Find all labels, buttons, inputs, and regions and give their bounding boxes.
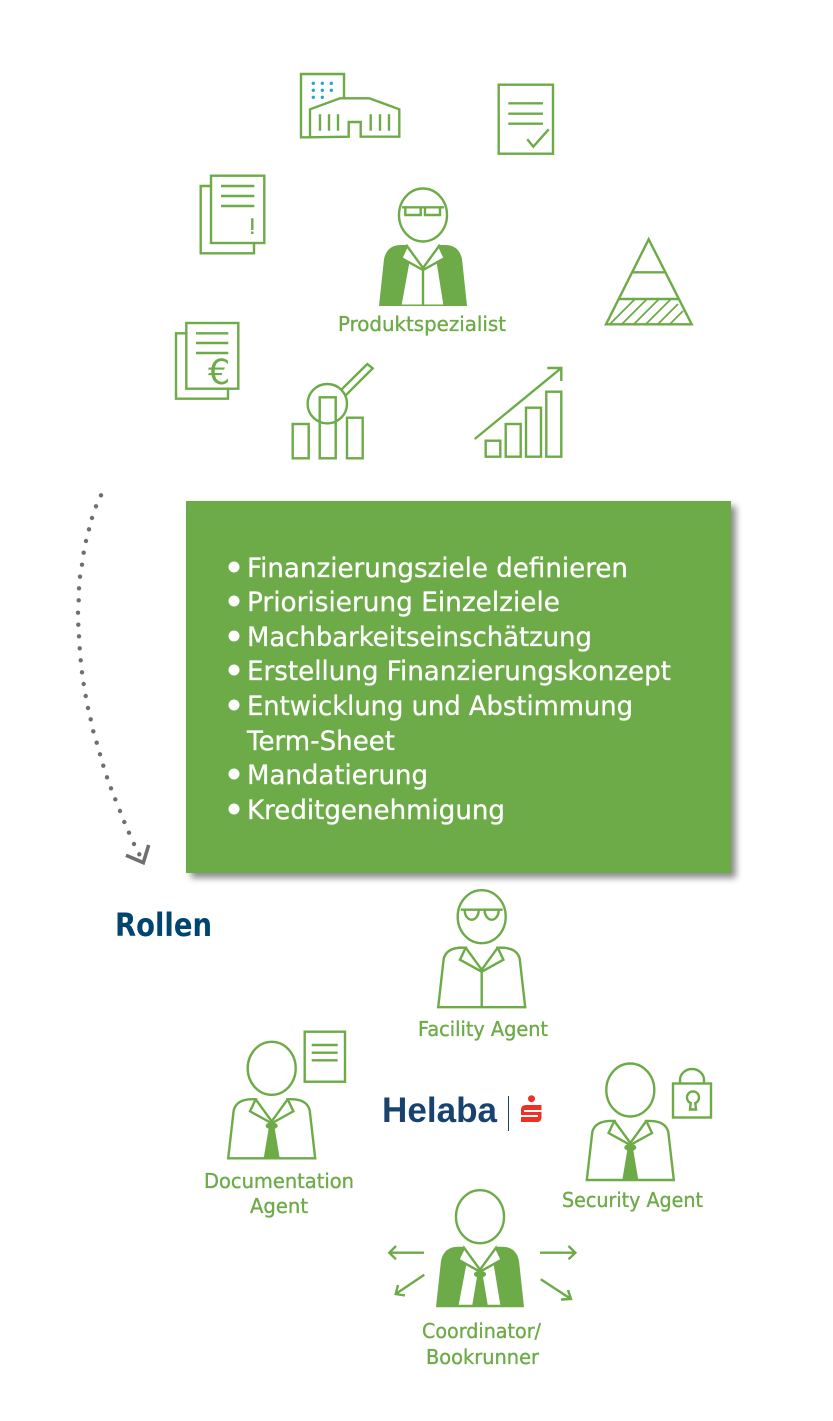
icon: documents with exclamation mark xyxy=(201,176,264,253)
list text: Finanzierungsziele definieren xyxy=(247,553,628,584)
icon: document with check mark xyxy=(499,85,553,154)
arrows: coordinator directions xyxy=(389,1246,575,1300)
label: Documentation Agent: Documentation xyxy=(204,1169,354,1193)
list text: Erstellung Finanzierungskonzept xyxy=(247,656,671,687)
list text: Entwicklung und Abstimmung xyxy=(247,691,633,722)
dotted arrow xyxy=(76,493,149,863)
label: Security Agent: Security Agent xyxy=(562,1188,703,1212)
icon: building xyxy=(301,74,399,137)
label: Coordinator/Bookrunner: Coordinator/ xyxy=(422,1319,541,1343)
label: Documentation Agent: Agent xyxy=(250,1194,308,1218)
icon: document xyxy=(305,1032,345,1082)
icon: padlock xyxy=(673,1069,711,1118)
list text: Term-Sheet xyxy=(246,726,395,757)
bullets xyxy=(228,562,240,814)
glasses xyxy=(402,207,444,215)
list text: Machbarkeitseinschätzung xyxy=(247,622,592,653)
logo: Helaba: Helaba xyxy=(382,1091,498,1130)
lapels xyxy=(401,246,445,270)
jacket xyxy=(379,245,467,306)
icon: growth bar chart with arrow xyxy=(475,368,561,457)
icon: magnifier over bar chart xyxy=(293,364,373,458)
panel: task list xyxy=(186,501,736,878)
person: Documentation Agent xyxy=(228,1042,315,1158)
label: Documentation Agent xyxy=(204,1169,354,1218)
icon: documents with euro sign xyxy=(176,323,238,399)
icon: documents with euro sign: € xyxy=(208,353,230,393)
list text: Priorisierung Einzelziele xyxy=(247,587,560,618)
heading: Rollen: Rollen xyxy=(115,906,212,944)
icon: pyramid xyxy=(606,239,692,324)
list text: Mandatierung xyxy=(247,760,428,791)
person: Produktspezialist xyxy=(379,188,467,306)
label: Coordinator/Bookrunner: Bookrunner xyxy=(426,1345,540,1369)
person: Facility Agent xyxy=(438,890,525,1007)
label: Produktspezialist: Produktspezialist xyxy=(338,312,506,336)
label: Coordinator/Bookrunner xyxy=(422,1319,541,1369)
list text xyxy=(246,553,671,826)
list text: Kreditgenehmigung xyxy=(247,795,505,826)
person: Security Agent xyxy=(587,1064,674,1180)
label: Facility Agent: Facility Agent xyxy=(418,1017,548,1041)
person: Coordinator/Bookrunner xyxy=(436,1190,524,1307)
shirt xyxy=(402,263,443,304)
